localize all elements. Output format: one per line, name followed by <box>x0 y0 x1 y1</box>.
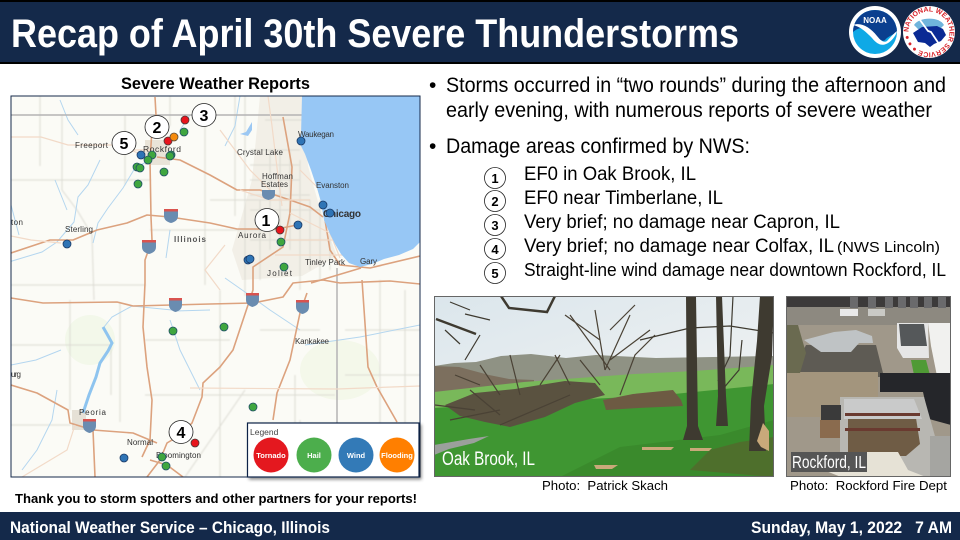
river: lake at Waukesha <box>240 122 252 136</box>
city labels: Crystal Lake <box>237 148 284 157</box>
bullet: two rounds <box>429 74 946 122</box>
city labels: Tinley Park <box>305 258 346 267</box>
legend <box>248 423 419 477</box>
city labels: urg <box>11 370 21 379</box>
photo caption: Oak Brook: Oak Brook, IL <box>442 449 535 470</box>
list of damage areas: 5 <box>491 266 499 281</box>
city labels: Freeport <box>75 141 109 150</box>
icon: NOAA logo <box>849 6 901 58</box>
legend: flooding <box>380 438 414 472</box>
highways <box>11 97 450 477</box>
city labels <box>11 130 377 460</box>
list of damage areas: (NWS Lincoln) <box>837 240 940 256</box>
footer bar <box>0 512 960 540</box>
map: severe weather reports: 4 <box>177 425 186 442</box>
city labels: Normal <box>127 438 153 447</box>
city labels: Kankakee <box>295 337 330 346</box>
city labels: Peoria <box>79 408 107 417</box>
fallen tree <box>445 381 605 427</box>
photo: Rockford <box>786 296 951 477</box>
list of damage areas: Very brief; no damage near Capron, IL <box>524 212 840 233</box>
bullet: damage areas: Damage areas confirmed by NWS: <box>446 135 750 158</box>
map: severe weather reports <box>2 96 450 477</box>
bullet: two rounds: • <box>429 74 436 97</box>
city labels: Evanston <box>316 181 349 190</box>
fairway <box>434 365 774 410</box>
city labels: Joliet <box>267 269 293 278</box>
numbered callouts on map <box>112 104 279 444</box>
photo: Oak Brook <box>434 296 780 477</box>
vegetation and urban tints <box>65 96 380 430</box>
city labels: Chicago <box>323 209 361 220</box>
county lines <box>11 96 420 477</box>
legend: tornado: Tornado <box>256 451 286 460</box>
title: Recap of April 30th Severe Thunderstorms <box>11 12 739 56</box>
distant treeline <box>434 354 774 382</box>
map: severe weather reports: 2 <box>153 120 162 137</box>
city labels: Hoffman <box>262 172 293 181</box>
river: Illinois <box>83 327 112 413</box>
city labels: Waukegan <box>298 130 334 139</box>
city labels: Aurora <box>238 231 267 240</box>
list of damage areas: EF0 near Timberlane, IL <box>524 188 723 209</box>
list of damage areas: 2 <box>491 194 499 209</box>
report dots: wind <box>63 137 334 462</box>
map: severe weather reports: 5 <box>120 136 129 153</box>
legend: hail <box>296 438 332 472</box>
legend: wind: Wind <box>347 451 366 460</box>
header banner <box>0 0 960 64</box>
icon: NOAA logo: NOAA <box>863 16 887 25</box>
legend: tornado <box>254 438 288 472</box>
legend: flooding: Flooding <box>381 451 413 460</box>
interstate shields <box>83 190 309 433</box>
photo credit: Rockford Fire Dept: Photo: Rockford Fire Dept <box>790 478 947 493</box>
city labels: Bloomington <box>156 451 201 460</box>
report dots: hail <box>133 128 288 470</box>
report dots: tornado <box>164 116 284 447</box>
list of damage areas: 3 <box>491 218 499 233</box>
list of damage areas <box>484 164 946 284</box>
icon: National Weather Service logo: NATIONAL WEATHER SERVICE ● ● ● <box>904 6 954 58</box>
photo credit: Patrick Skach: Photo: Patrick Skach <box>542 478 668 493</box>
city labels: Illinois <box>174 235 207 244</box>
list of damage areas: EF0 in Oak Brook, IL <box>524 164 696 185</box>
heading: severe weather reports: Severe Weather Reports <box>121 74 310 93</box>
legend: Legend <box>250 427 279 437</box>
list of damage areas: 1 <box>491 171 499 186</box>
rooftops <box>897 323 929 358</box>
city labels: Sterling <box>65 225 93 234</box>
report dot: flooding <box>170 133 178 141</box>
city labels: Estates <box>261 180 288 189</box>
lake michigan <box>300 96 420 267</box>
city labels: Gary <box>360 257 377 266</box>
legend: wind <box>338 438 374 472</box>
city labels: ton <box>11 218 23 227</box>
bullet: two rounds: early evening, with numerous reports of severe weather <box>446 99 932 122</box>
list of damage areas: Straight-line wind damage near downtown Rockford, IL <box>524 260 946 280</box>
state line <box>11 115 337 423</box>
secondary roads <box>11 96 420 477</box>
list of damage areas: 4 <box>491 242 499 257</box>
list of damage areas: Very brief; no damage near Colfax, IL <box>524 236 834 257</box>
thank you note: Thank you to storm spotters and other partners for your reports! <box>15 491 417 506</box>
rivers <box>2 96 420 470</box>
map: severe weather reports: 3 <box>200 108 209 125</box>
bullet: damage areas: • <box>429 135 436 158</box>
map: severe weather reports: 1 <box>262 213 271 230</box>
photo caption: Rockford: Rockford, IL <box>792 452 866 472</box>
lawn <box>434 384 774 477</box>
standing trees <box>683 296 774 451</box>
legend: hail: Hail <box>307 451 321 460</box>
city labels: Rockford <box>143 144 181 154</box>
footer: office name: National Weather Service – Chicago, Illinois <box>10 518 330 537</box>
